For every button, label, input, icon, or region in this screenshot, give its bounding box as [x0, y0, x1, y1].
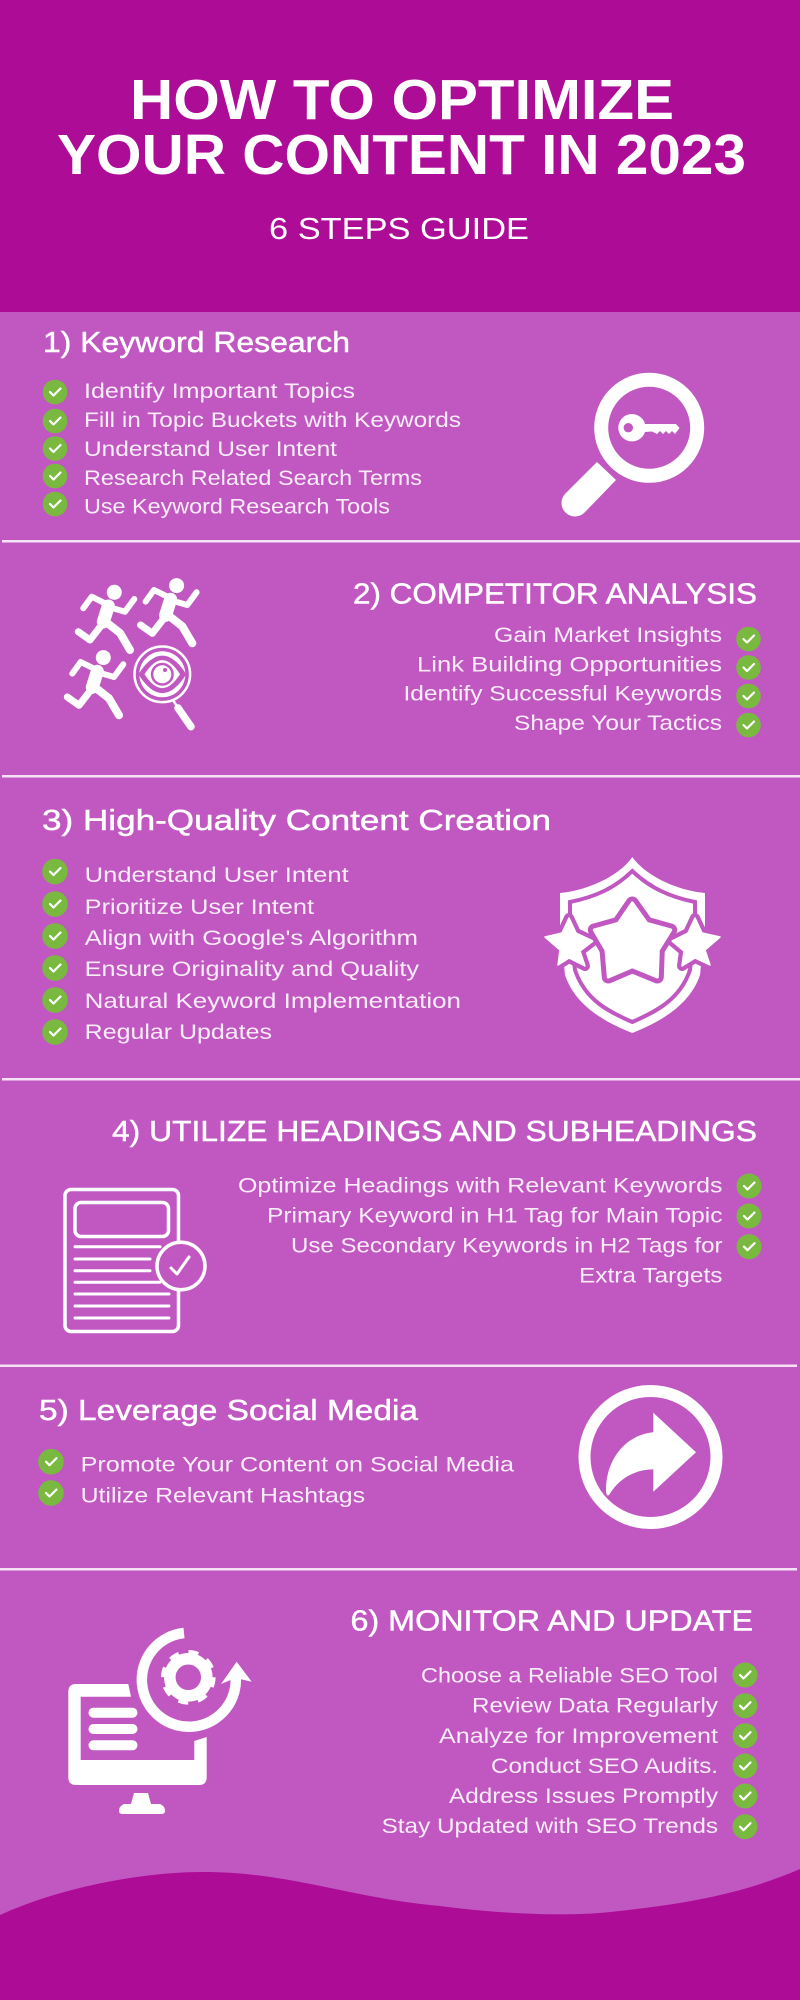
list item: Ensure Originality and Quality — [85, 958, 420, 981]
list item — [449, 1784, 758, 1808]
list item: Identify Important Topics — [84, 380, 355, 403]
icon: shield with stars — [545, 857, 720, 1033]
list item — [42, 891, 314, 919]
list item — [42, 923, 418, 950]
list item — [42, 1019, 272, 1045]
list item: Stay Updated with SEO Trends — [382, 1815, 718, 1838]
list item — [43, 492, 390, 518]
panel: step 6 monitor and update — [0, 1571, 800, 1871]
icon: magnifier with key — [562, 380, 697, 516]
title: YOUR CONTENT IN 2023 — [57, 123, 746, 186]
runner 1 — [78, 585, 134, 650]
list item — [42, 955, 420, 981]
icon: monitor with gear and arrow — [68, 1633, 252, 1814]
list item: Analyze for Improvement — [439, 1725, 718, 1748]
title — [57, 68, 746, 186]
list item: Align with Google's Algorithm — [85, 927, 418, 950]
runner 3 — [67, 650, 123, 715]
panel: step 2 competitor analysis — [0, 543, 800, 775]
heading: step 1: 1) Keyword Research — [43, 327, 350, 359]
panel: step 3 content creation — [0, 778, 800, 1078]
list item — [404, 683, 761, 708]
subtitle: 6 STEPS GUIDE — [269, 211, 529, 246]
list item: Shape Your Tactics — [514, 712, 722, 735]
list item: Optimize Headings with Relevant Keywords — [238, 1175, 722, 1198]
heading: step 3: 3) High-Quality Content Creation — [42, 805, 551, 837]
list item — [291, 1234, 762, 1288]
list item: Natural Keyword Implementation — [85, 990, 461, 1013]
list item: Extra Targets — [579, 1265, 722, 1288]
heading: step 6: 6) MONITOR AND UPDATE — [350, 1606, 753, 1638]
divider — [0, 1568, 797, 1570]
list item — [42, 987, 461, 1013]
title: HOW TO OPTIMIZE — [130, 68, 674, 131]
list item: Use Secondary Keywords in H2 Tags for — [291, 1235, 723, 1258]
eye magnifier — [134, 646, 191, 727]
list item — [472, 1693, 758, 1718]
panel: header — [0, 0, 800, 312]
panel: step 4 headings — [0, 1081, 800, 1365]
list item: Review Data Regularly — [472, 1695, 719, 1718]
list item — [43, 380, 355, 404]
list item: Fill in Topic Buckets with Keywords — [84, 409, 461, 432]
panel: step 1 keyword research — [0, 312, 800, 541]
icon: share arrow in circle — [584, 1391, 716, 1523]
list item — [38, 1480, 365, 1508]
divider — [2, 775, 800, 778]
list item: Promote Your Content on Social Media — [81, 1454, 515, 1477]
list item: Understand User Intent — [85, 864, 349, 887]
list item: Regular Updates — [85, 1021, 272, 1044]
list item: Conduct SEO Audits. — [491, 1755, 718, 1778]
list item — [43, 464, 422, 490]
heading: step 4: 4) UTILIZE HEADINGS AND SUBHEADINGS — [112, 1116, 757, 1148]
list item: Primary Keyword in H1 Tag for Main Topic — [267, 1205, 722, 1228]
divider — [2, 1078, 800, 1080]
list item — [42, 859, 349, 887]
footer wave — [0, 1869, 800, 2000]
list item: Prioritize User Intent — [85, 896, 314, 919]
list item — [514, 712, 761, 737]
runner 2 — [141, 578, 197, 643]
list item — [43, 436, 337, 461]
list item — [494, 624, 761, 651]
icon: runners and eye magnifier — [67, 578, 197, 727]
divider — [0, 1364, 797, 1367]
list item — [491, 1754, 758, 1778]
list item: Link Building Opportunities — [417, 653, 722, 676]
list item: Gain Market Insights — [494, 624, 722, 647]
icon: document with check — [65, 1190, 205, 1332]
list item — [439, 1723, 758, 1748]
list item — [38, 1449, 515, 1477]
list item: Identify Successful Keywords — [404, 683, 722, 706]
heading: step 2: 2) COMPETITOR ANALYSIS — [353, 578, 757, 610]
list item: Understand User Intent — [84, 438, 337, 461]
divider — [2, 540, 800, 542]
list item: Research Related Search Terms — [84, 467, 422, 490]
list item — [417, 653, 761, 680]
list item: Choose a Reliable SEO Tool — [421, 1665, 718, 1688]
list item: Utilize Relevant Hashtags — [81, 1485, 365, 1508]
list item: Use Keyword Research Tools — [84, 496, 390, 518]
panel: step 5 social media — [0, 1367, 800, 1568]
list item: Address Issues Promptly — [449, 1785, 719, 1808]
heading: step 5: 5) Leverage Social Media — [39, 1395, 418, 1427]
